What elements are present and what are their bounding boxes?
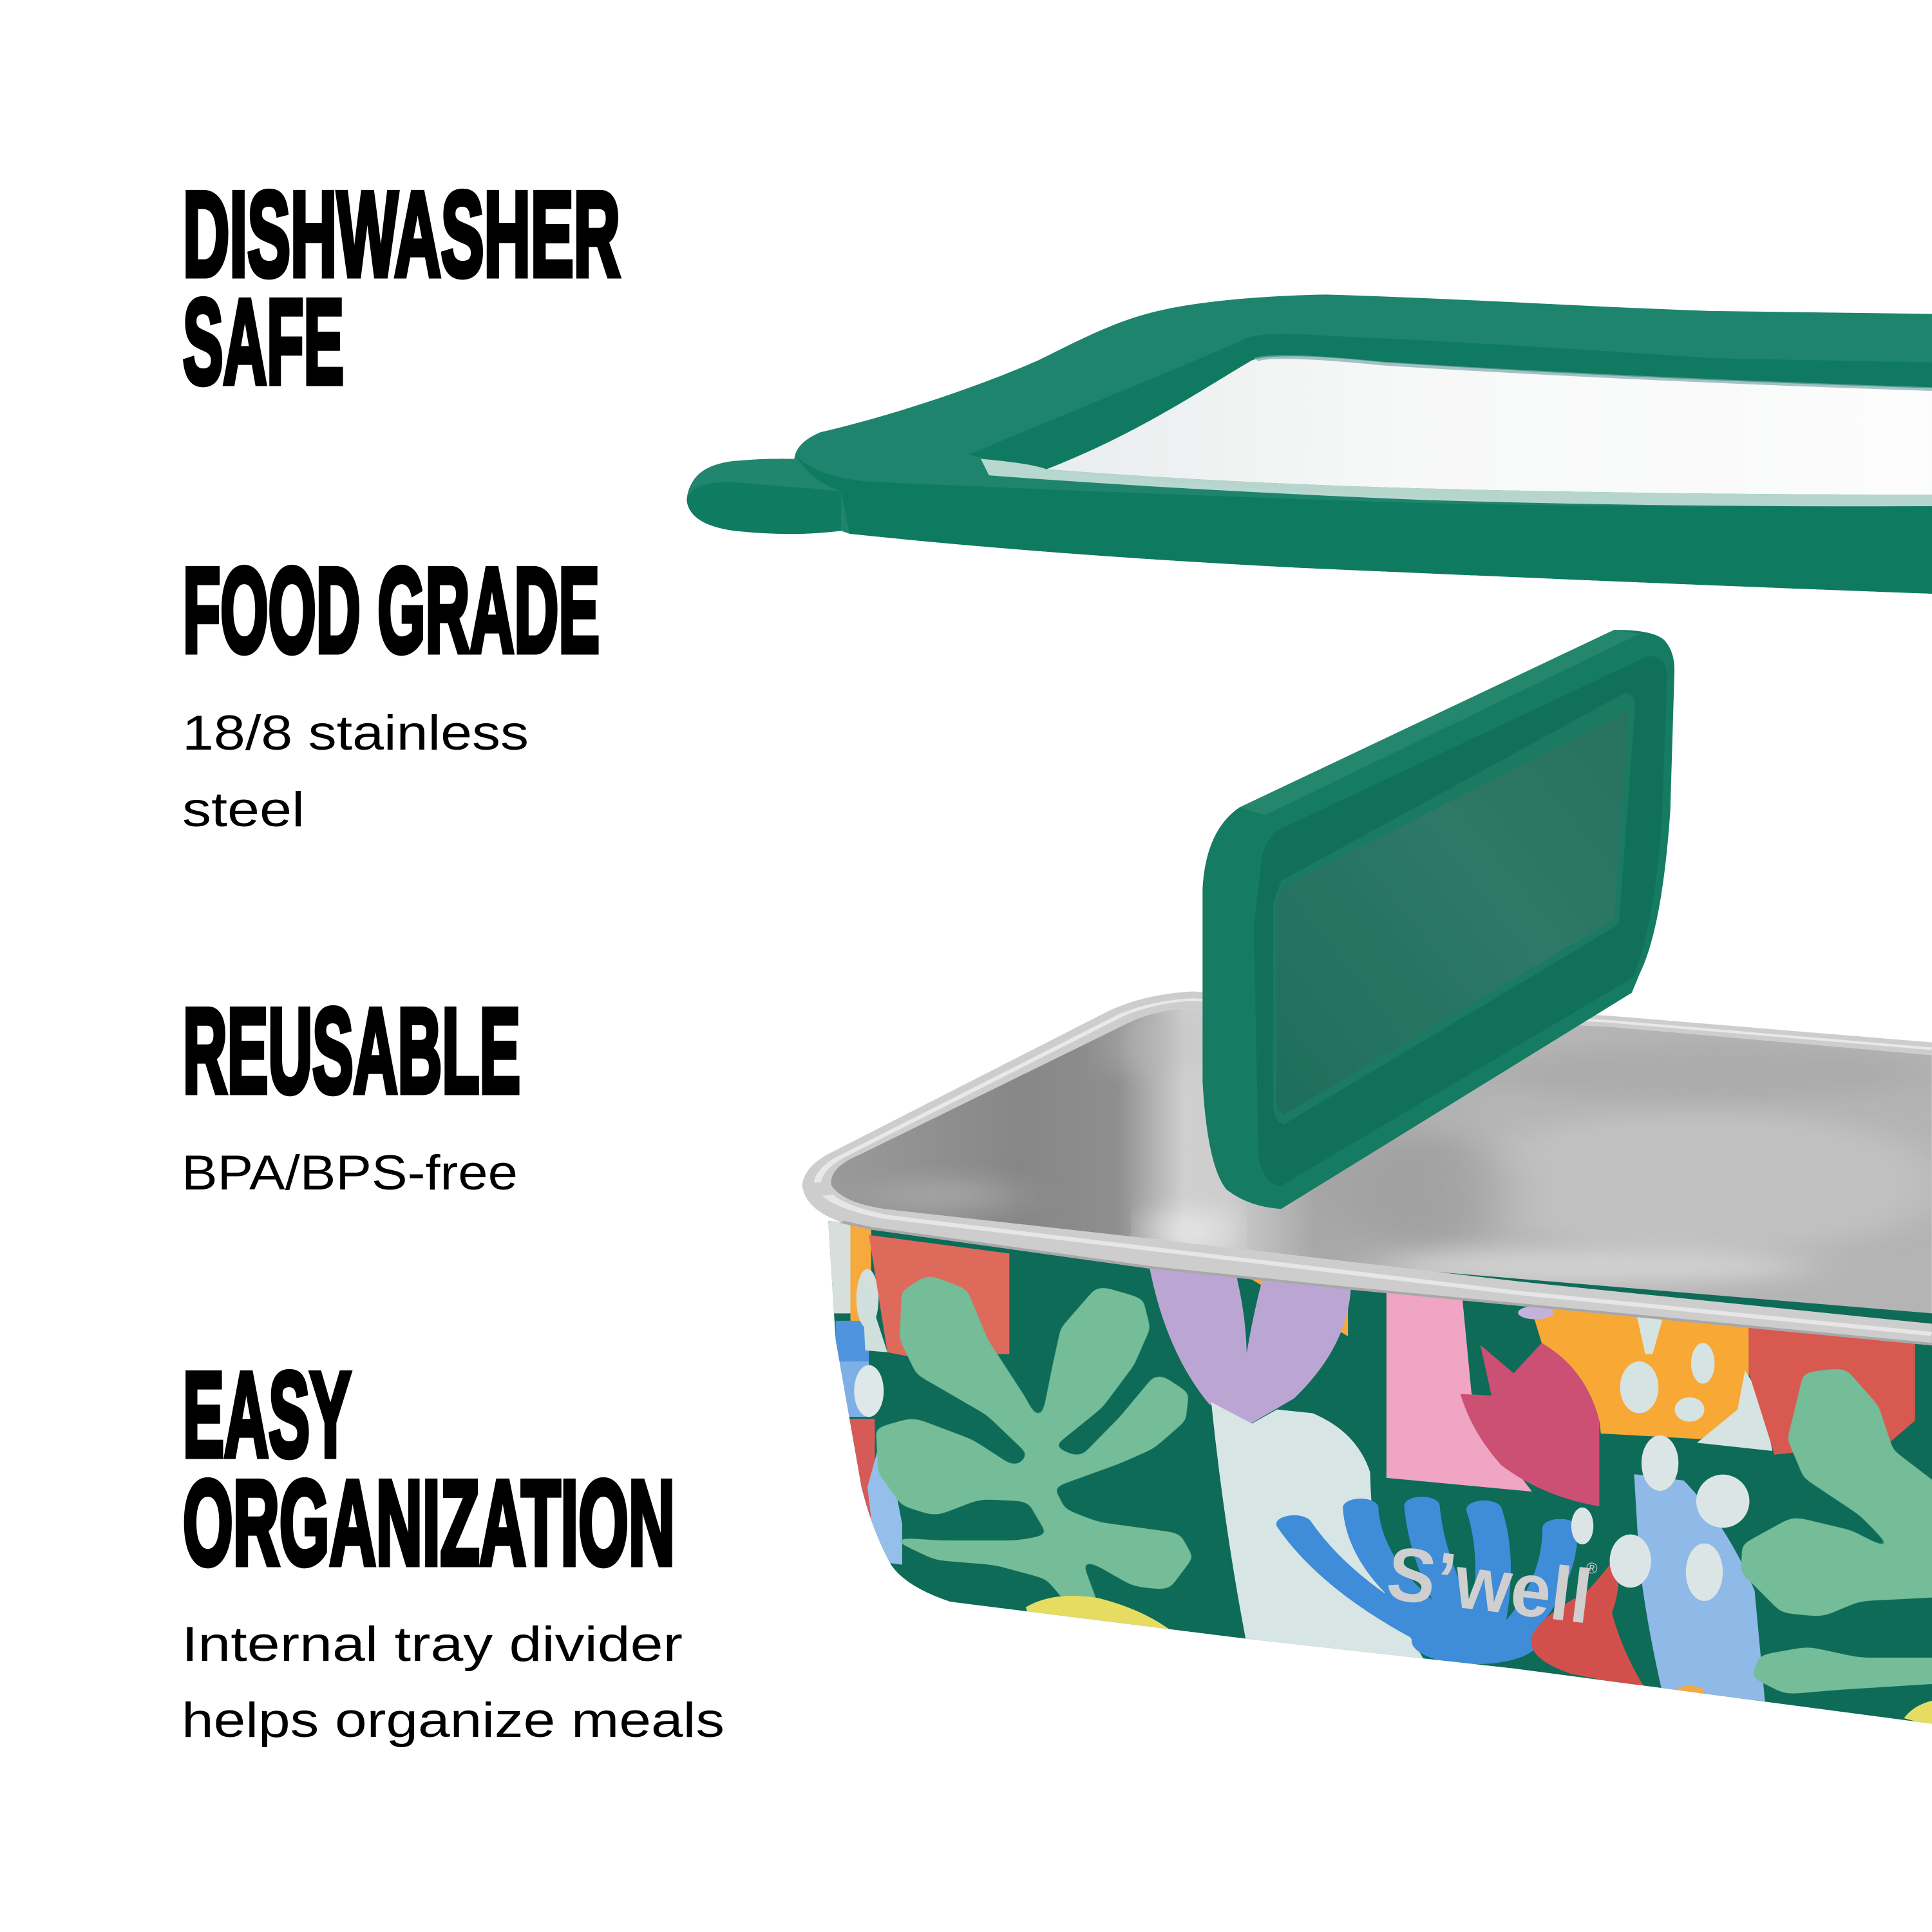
metal strip left edge bbox=[828, 1217, 851, 1313]
pale triangle left bbox=[862, 1273, 887, 1352]
lid tab bbox=[687, 482, 841, 534]
patterned tray body bbox=[828, 1221, 1932, 1723]
rim front shadow bbox=[842, 1222, 1932, 1344]
S'well logo: ® bbox=[1585, 1559, 1598, 1578]
divider inner panel bbox=[1276, 711, 1629, 1114]
heading: Dishwasher Safe: DISHWASHER bbox=[183, 167, 620, 301]
text: 18/8 stainless steel: 18/8 stainless bbox=[182, 706, 529, 761]
heading: Dishwasher Safe bbox=[183, 167, 620, 409]
lilac tulip shape bbox=[1148, 1262, 1351, 1425]
orange dot bbox=[1675, 1686, 1704, 1696]
crimson tulip bbox=[1461, 1343, 1599, 1506]
small orange behind lilac bbox=[1249, 1278, 1348, 1336]
text: 18/8 stainless steel bbox=[182, 706, 529, 837]
lid front band bbox=[796, 455, 1932, 594]
tray divider bbox=[1202, 630, 1674, 1209]
green leaf right bbox=[1741, 1368, 1932, 1694]
text: 18/8 stainless steel: steel bbox=[182, 782, 305, 837]
divider top edge highlight bbox=[1240, 630, 1640, 815]
lid silhouette bbox=[687, 294, 1932, 594]
light blue bottle bbox=[1634, 1474, 1765, 1701]
text: internal tray divider helps organize meals: Internal tray divider bbox=[182, 1617, 683, 1672]
orange block bbox=[1531, 1307, 1748, 1439]
text: internal tray divider helps organize meals: helps organize meals bbox=[182, 1693, 724, 1748]
tray rim bbox=[802, 992, 1932, 1345]
text: internal tray divider helps organize meals bbox=[182, 1617, 724, 1748]
blue coral hand bbox=[1294, 1506, 1560, 1655]
heading: Dishwasher Safe: SAFE bbox=[183, 274, 344, 409]
body base green bbox=[828, 1221, 1932, 1723]
lid inner wall bbox=[969, 334, 1932, 508]
green leaf left bbox=[876, 1274, 1193, 1609]
yellow shape bottom left bbox=[1026, 1596, 1172, 1631]
text column: feature list bbox=[182, 167, 724, 1748]
heading: Easy Organization: EASY bbox=[183, 1347, 351, 1482]
heading: Easy Organization bbox=[183, 1347, 675, 1590]
divider step bbox=[1273, 694, 1635, 1124]
lower pale lip bbox=[981, 459, 1932, 506]
coral block right bbox=[1748, 1323, 1915, 1455]
white dots in orange bbox=[1620, 1313, 1772, 1451]
text: BPA/BPS-free: BPA/BPS-free bbox=[182, 1146, 518, 1200]
rim front highlight bbox=[828, 1195, 1932, 1334]
left edge colour strip bbox=[836, 1225, 902, 1565]
S'well logo: S’well bbox=[1383, 1531, 1596, 1640]
heading: Reusable: REUSABLE bbox=[183, 983, 520, 1118]
stainless steel tray interior bbox=[831, 1009, 1932, 1314]
yellow shape bottom right bbox=[1904, 1700, 1932, 1727]
pink block bbox=[1387, 1287, 1532, 1492]
red fruit bbox=[1531, 1555, 1645, 1689]
lid glass window bbox=[1046, 356, 1932, 495]
coral block bbox=[869, 1235, 1009, 1356]
rim highlight bbox=[817, 999, 1932, 1182]
heading: Food Grade: FOOD GRADE bbox=[183, 543, 600, 677]
divider outer shape bbox=[1202, 630, 1674, 1209]
lid tab top bbox=[690, 459, 837, 489]
lilac dot bbox=[1518, 1306, 1553, 1320]
divider outer recess bbox=[1254, 656, 1667, 1186]
green silicone glass lid bbox=[687, 294, 1932, 594]
heading: Easy Organization: ORGANIZATION bbox=[183, 1455, 675, 1590]
rim band bbox=[802, 992, 1932, 1345]
glass top edge reflection bbox=[1256, 357, 1932, 389]
white blobs on bottle bbox=[1571, 1435, 1750, 1601]
pale white cutout shape bbox=[1211, 1402, 1427, 1665]
